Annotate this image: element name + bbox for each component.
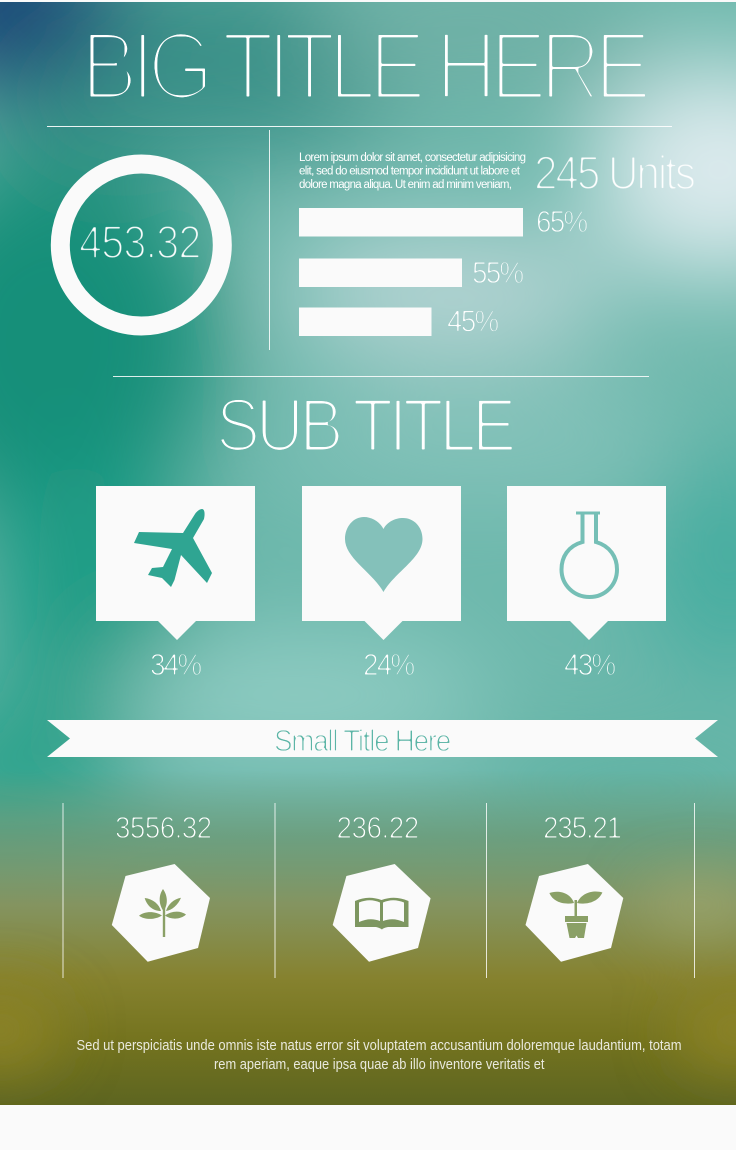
footer text: rem aperiam, eaque ipsa quae ab illo inventore veritatis et [214, 1056, 545, 1073]
value: 43% [564, 648, 616, 682]
ribbon banner [47, 720, 718, 758]
ring value: 453.32 [79, 217, 201, 269]
icon: leafy plant [139, 889, 186, 937]
label 55%: 55% [472, 256, 524, 290]
column divider [269, 130, 270, 350]
panel: book metric [333, 811, 431, 962]
intro text [299, 152, 526, 191]
icon: airplane [134, 509, 212, 587]
title: BIG TITLE HERE [81, 12, 651, 120]
card shape [507, 486, 666, 640]
value: 235.21 [543, 811, 622, 845]
panel: heart card [302, 486, 461, 682]
intro text: Lorem ipsum dolor sit amet, consectetur adipisicing [299, 152, 526, 164]
bar 45% [299, 308, 432, 336]
bar 55% [299, 258, 462, 287]
subtitle: SUB TITLE [216, 383, 516, 467]
intro text: elit, sed do eiusmod tempor incididunt ut labore et [299, 166, 521, 178]
panel: sprout metric [112, 811, 212, 962]
top edge strip [0, 0, 736, 2]
units value: 245 Units [534, 148, 696, 200]
card shape [96, 486, 255, 640]
value: 24% [363, 648, 415, 682]
icon: open book [355, 898, 408, 930]
hexagon [112, 864, 210, 962]
panel: units and bars [299, 148, 696, 339]
value: 236.22 [336, 811, 419, 845]
hexagon [333, 864, 431, 962]
footer text [76, 1037, 682, 1073]
label 65%: 65% [536, 205, 588, 239]
intro text: dolore magna aliqua. Ut enim ad minim veniam, [299, 179, 512, 191]
icon: potted plant [549, 892, 602, 938]
value: 34% [150, 648, 202, 682]
column dividers [62, 803, 695, 978]
subtitle rule [113, 376, 649, 377]
panel: airplane card [96, 486, 255, 682]
ribbon shape [47, 720, 718, 757]
icon: heart [345, 517, 422, 592]
ring [60, 164, 222, 326]
bar 65% [299, 208, 523, 236]
title rule [47, 126, 672, 127]
ribbon title: Small Title Here [274, 724, 451, 758]
icon: flask [562, 513, 617, 597]
value: 3556.32 [115, 811, 212, 845]
hexagon [526, 864, 623, 962]
panel: flask card [507, 486, 666, 682]
panel: potted plant metric [526, 811, 623, 962]
label 45%: 45% [447, 304, 499, 339]
panel: ring metric [60, 164, 222, 326]
card shape [302, 486, 461, 640]
